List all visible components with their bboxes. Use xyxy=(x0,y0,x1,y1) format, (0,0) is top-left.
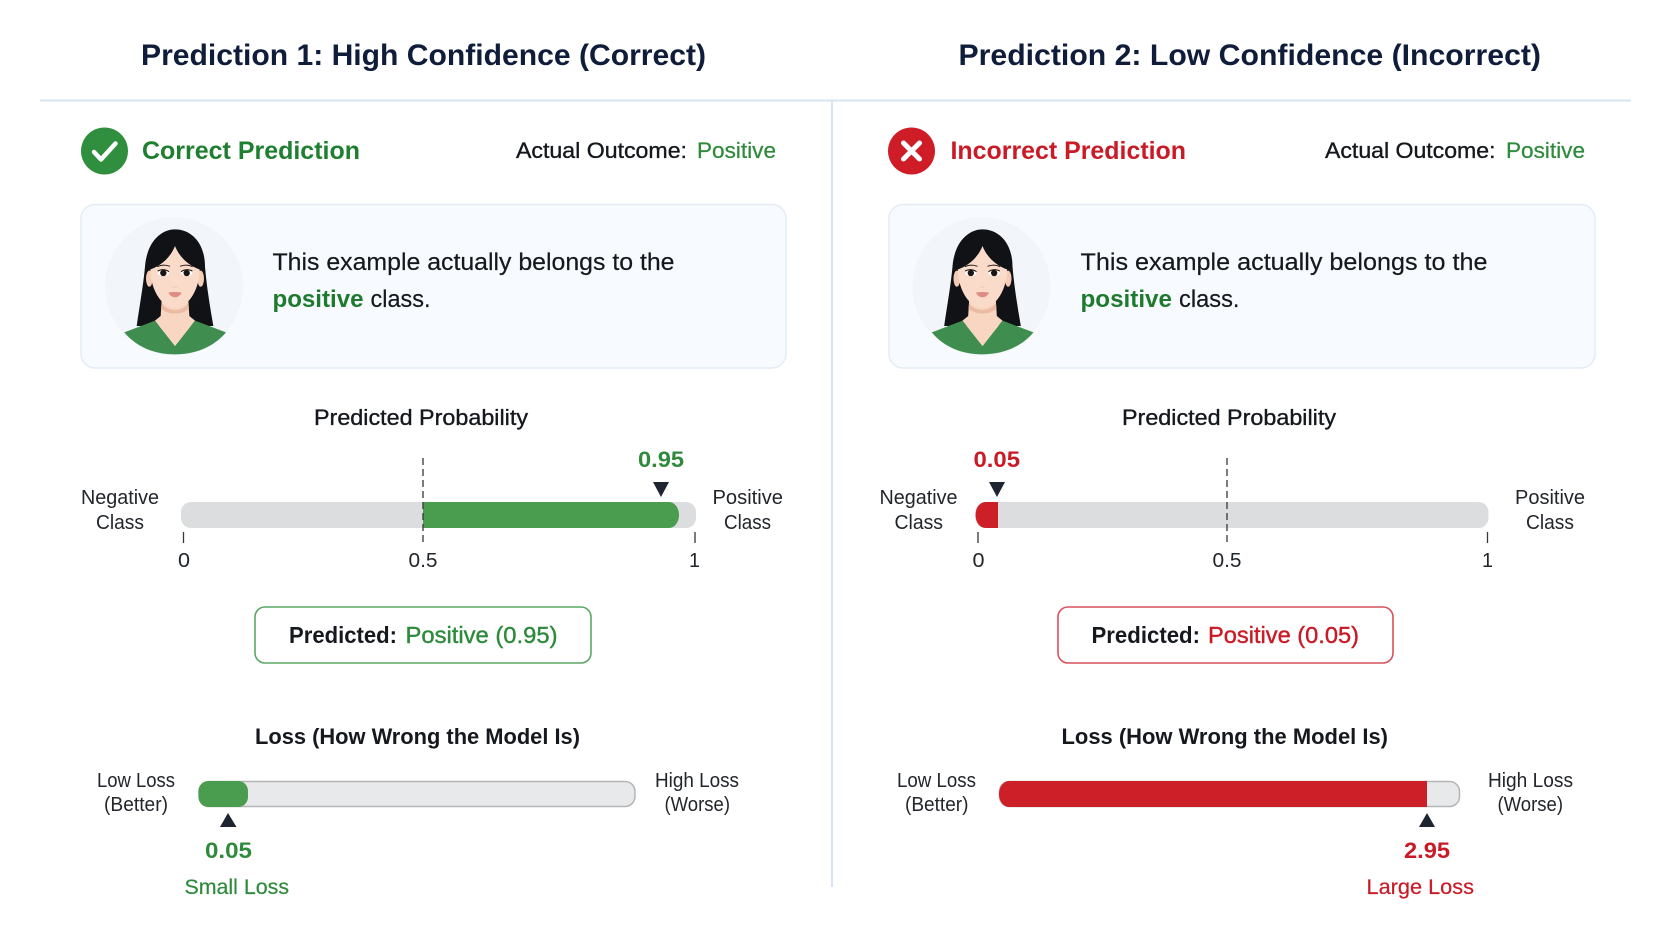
axis labels: 0 xyxy=(178,550,190,572)
axis labels: 1 xyxy=(1482,550,1493,572)
axis labels xyxy=(178,550,700,572)
card text: This example actually belongs to the xyxy=(272,249,674,276)
icon: woman avatar xyxy=(105,217,243,355)
negative class label: Class xyxy=(96,512,144,534)
loss bar chart xyxy=(897,770,1573,899)
high loss label: High Loss xyxy=(1488,770,1573,792)
actual outcome: Actual Outcome: xyxy=(516,138,687,163)
positive class label: Positive xyxy=(1515,487,1585,509)
card text xyxy=(272,249,674,313)
marker value 0.05: 0.05 xyxy=(205,838,252,863)
positive class label xyxy=(1515,487,1585,534)
low loss label: Low Loss xyxy=(97,770,175,792)
axis labels: 0.5 xyxy=(408,550,438,572)
status label: Correct Prediction xyxy=(142,137,360,165)
axis labels: 1 xyxy=(689,550,700,572)
high loss label xyxy=(1488,770,1573,816)
status label: Incorrect Prediction xyxy=(950,137,1186,165)
card text xyxy=(1080,249,1488,313)
title: prediction 1: Prediction 1: High Confidence (Correct) xyxy=(141,39,706,72)
probability bar chart xyxy=(81,447,783,572)
positive class label: Class xyxy=(724,512,771,534)
negative class label: Negative xyxy=(880,487,958,509)
example card xyxy=(889,204,1595,368)
low loss label: (Better) xyxy=(905,794,968,816)
positive class label xyxy=(712,487,783,534)
marker value 0.95 xyxy=(638,447,684,497)
card text: This example actually belongs to the xyxy=(1080,249,1488,276)
loss bar chart xyxy=(97,770,739,899)
card text: class. xyxy=(370,286,430,313)
card text: positive xyxy=(1080,286,1172,313)
negative class label: Class xyxy=(894,512,943,534)
card text: class. xyxy=(1179,286,1240,313)
actual outcome xyxy=(516,138,776,163)
panel: prediction 1 xyxy=(81,39,786,899)
high loss label xyxy=(655,770,739,816)
marker value 2.95 xyxy=(1366,813,1474,899)
predicted result box: Positive (0.95) xyxy=(406,622,558,648)
negative class label: Negative xyxy=(81,487,159,509)
high loss label: (Worse) xyxy=(1498,794,1563,816)
panel: prediction 2 xyxy=(880,39,1595,899)
status row: correct prediction xyxy=(81,128,360,174)
status row: incorrect prediction xyxy=(888,128,1186,174)
axis labels xyxy=(972,550,1493,572)
low loss label: Low Loss xyxy=(897,770,976,792)
title: prediction 2: Prediction 2: Low Confidence (Incorrect) xyxy=(958,39,1541,72)
icon: green check xyxy=(81,128,128,174)
low loss label xyxy=(897,770,976,816)
positive class label: Class xyxy=(1526,512,1574,534)
high loss label: (Worse) xyxy=(664,794,730,816)
low loss label xyxy=(97,770,175,816)
negative class label xyxy=(81,487,159,534)
marker value 0.05: Small Loss xyxy=(184,876,289,899)
card text: positive xyxy=(272,286,364,313)
predicted result box xyxy=(255,607,591,663)
predicted result box xyxy=(1058,607,1393,663)
axis labels: 0.5 xyxy=(1212,550,1242,572)
actual outcome: Positive xyxy=(1506,138,1585,163)
axis labels: 0 xyxy=(972,550,984,572)
marker value 2.95: 2.95 xyxy=(1404,838,1450,863)
marker value 0.05 xyxy=(974,447,1020,497)
marker value 0.95: 0.95 xyxy=(638,447,684,472)
actual outcome: Positive xyxy=(697,138,776,163)
predicted probability heading: Predicted Probability xyxy=(314,405,528,430)
loss heading: Loss (How Wrong the Model Is) xyxy=(255,724,580,749)
predicted result box: Positive (0.05) xyxy=(1208,622,1359,648)
loss heading: Loss (How Wrong the Model Is) xyxy=(1062,724,1388,749)
high loss label: High Loss xyxy=(655,770,739,792)
predicted probability heading: Predicted Probability xyxy=(1122,405,1336,430)
predicted result box: Predicted: xyxy=(289,622,397,648)
icon: woman avatar xyxy=(912,217,1050,355)
probability bar chart xyxy=(880,447,1585,572)
example card xyxy=(81,204,786,368)
marker value 2.95: Large Loss xyxy=(1366,876,1474,899)
actual outcome: Actual Outcome: xyxy=(1325,138,1496,163)
negative class label xyxy=(880,487,958,534)
icon: red cross xyxy=(888,128,935,174)
actual outcome xyxy=(1325,138,1585,163)
marker value 0.05: 0.05 xyxy=(974,447,1020,472)
low loss label: (Better) xyxy=(104,794,168,816)
positive class label: Positive xyxy=(712,487,783,509)
marker value 0.05 xyxy=(184,813,289,899)
predicted result box: Predicted: xyxy=(1092,622,1200,648)
